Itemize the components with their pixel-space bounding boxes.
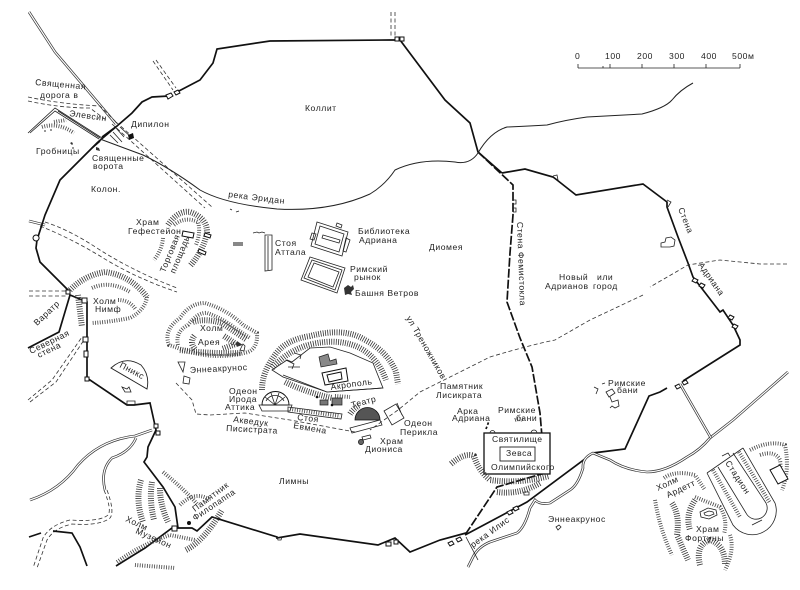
Odeon of Herodes Atticus [259,392,292,411]
scale bar: 500м [732,51,754,61]
labels: рынок [354,272,381,282]
hill of Ardettos and temple of Fortune [655,473,732,570]
labels: Холм [124,514,150,533]
labels: Башня Ветров [355,288,419,298]
labels: Дипилон [131,119,170,129]
labels: Ардетт [665,478,697,500]
Stoa of Eumenes [288,396,342,419]
labels: Пникс [118,360,146,381]
labels: Холм [200,323,223,333]
labels: Акведук [233,414,269,428]
road: Sacred Way and approaches [28,12,395,568]
Ilissos river [466,372,788,567]
labels: Стадион [723,459,752,496]
labels: Адриана [359,235,397,245]
Roman baths [594,383,619,408]
scale bar: 100 [605,51,621,61]
labels: Музейон [134,526,173,550]
labels: Храм [380,436,403,446]
labels: Аттала [275,247,306,257]
labels: Элевсин [69,108,108,123]
labels [27,77,752,550]
scale bar [575,51,754,68]
labels: Адриана [452,413,490,423]
Stoa of Attalos [233,232,272,271]
labels: или [597,272,613,282]
labels: Гефестейон [128,226,181,236]
Enneakrounos monument near Areopagus [122,362,190,392]
dashed aqueduct of Peisistratos [176,383,355,432]
labels: река Илис [468,514,511,550]
labels: Евмена [293,420,328,436]
Stadium [707,448,776,535]
Theatre of Dionysus [350,405,382,445]
labels: Храм [696,524,719,534]
Tower of the Winds [344,285,354,295]
labels: Памятник [190,480,231,514]
labels: стена [35,340,63,360]
Hephaisteion hill [154,212,211,266]
Library of Hadrian [310,222,350,256]
labels: Эннеакрунос [190,362,248,375]
Pnyx [111,361,148,389]
labels: ворота [93,161,124,171]
labels: река Эридан [228,189,286,206]
hill of the Muses [117,472,222,568]
labels: Адрианов [545,281,589,291]
city wall: Themistocles circuit [28,40,740,566]
dashed aqueduct and road to the east [370,260,787,430]
labels: Диониса [365,444,403,454]
scale bar: 0 [575,51,580,61]
labels: Торговая [158,233,182,274]
labels: Холм [655,474,680,493]
labels: бани [516,413,537,423]
labels: Адриана [696,260,727,298]
small marks in the agora [230,209,239,212]
labels: Олимпийского [491,462,555,472]
labels: Театр [350,394,377,410]
labels: Эннеакрунос [548,514,606,524]
wall gates and towers [33,37,738,546]
labels: Коллит [305,103,337,113]
labels: Стена Фемистокла [515,222,528,306]
labels: Лимны [279,476,309,486]
sanctuary of Olympian Zeus [484,419,550,474]
labels: Нимф [95,304,121,314]
Enneakrounos spring [556,525,561,530]
hatching south of Olympieion [451,455,549,495]
labels: Памятник [440,381,483,391]
labels: дорога в [40,90,78,100]
labels: Стоя [297,412,319,424]
labels: Гробницы [36,146,80,156]
labels: Стена [676,206,696,235]
Acropolis hill [262,332,398,398]
labels: площадь [168,234,192,275]
labels: Аттика [225,402,255,412]
labels: Арея [198,337,220,347]
scale bar: 400 [701,51,717,61]
hadrianic structure on the wall [661,237,675,247]
Dipylon gate and Sacred Gate [92,126,134,151]
labels: Библиотека [358,226,410,236]
labels: Новый [559,272,588,282]
labels: Римские [608,378,646,388]
labels: Святилище [492,434,543,444]
labels: Священная [35,77,86,91]
scale bar: 300 [669,51,685,61]
labels: Одеон [404,418,433,428]
labels: город [593,281,618,291]
labels: бани [617,385,638,395]
labels: Римский [350,264,388,274]
labels: Холм [93,296,116,306]
hill of the Nymphs [70,272,147,327]
labels: Северная [27,328,71,356]
labels: Храм [136,217,159,227]
labels: Римские [498,405,536,415]
hill east of the stadium [750,443,788,490]
labels: ул Треножников [404,314,449,381]
labels: Колон. [91,184,121,194]
scale bar: 200 [637,51,653,61]
labels: Перикла [400,427,438,437]
labels: Стоя [275,238,297,248]
labels: Священные [92,153,144,163]
labels: Варатр [32,298,62,327]
labels: Зевса [506,448,532,458]
hill of Areopagus [167,303,257,356]
labels: Диомея [429,242,463,252]
labels: Писистрата [226,423,278,436]
labels: Фортуны [685,533,724,543]
labels: Лисикрата [436,390,482,400]
Eridanos river [100,83,693,209]
labels: Ирода [229,394,257,404]
labels: Арка [457,406,478,416]
tombs and walls west of the Sacred Gate [28,108,102,149]
Roman market [301,257,345,293]
Odeon of Pericles [384,403,404,425]
labels: Акрополь [330,376,373,392]
labels: Одеон [229,386,258,396]
labels: Филопаппа [191,487,237,523]
